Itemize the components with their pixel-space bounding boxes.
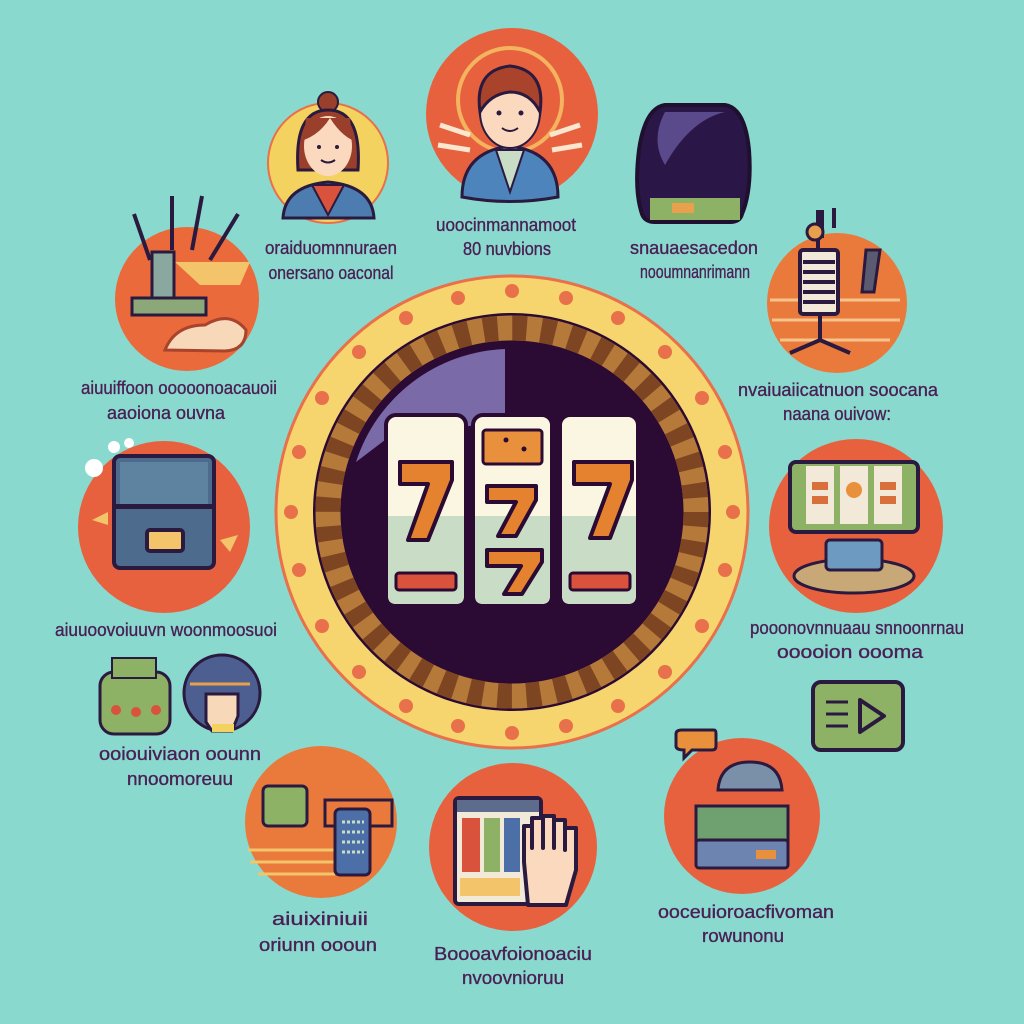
icon: wallet on orange circle — [664, 730, 820, 894]
icon: woman on yellow circle — [268, 92, 388, 223]
caption: bottom centre: Boooavfoionoaciu — [434, 944, 592, 964]
caption: top right: snauaesacedon — [630, 238, 758, 258]
caption: top right — [630, 238, 758, 282]
caption: top centre: 80 nuvbions — [463, 239, 551, 259]
rim dots — [284, 284, 740, 740]
caption: right upper — [738, 380, 939, 424]
caption: top right: nooumnanrimann — [640, 262, 750, 282]
caption: top centre — [436, 215, 576, 259]
caption: right middle: pooonovnnuaau snnoonrnau — [750, 618, 964, 638]
icon: video player — [813, 682, 903, 750]
caption: top left: onersano oaconal — [268, 263, 394, 283]
caption: top centre: uoocinmannamoot — [436, 215, 576, 235]
caption: right upper: nvaiuaiicatnuon soocana — [738, 380, 939, 400]
caption: bottom left: oriunn oooun — [259, 935, 377, 955]
icon: hand on blue circle — [184, 655, 260, 732]
caption: left upper — [81, 378, 277, 423]
caption: left middle: aiuuoovoiuuvn woonmoosuoi — [55, 620, 277, 640]
caption: bottom right — [658, 902, 834, 946]
icon: green gadget — [100, 658, 170, 734]
icon: microphone on orange circle — [767, 208, 907, 373]
caption: bottom right: ooceuioroacfivoman — [658, 902, 834, 922]
icon: man on orange circle — [426, 28, 598, 202]
caption: left lower: nnoomoreuu — [127, 769, 233, 789]
icon: router on orange circle — [115, 196, 259, 371]
caption: bottom left: aiuixiniuii — [272, 909, 368, 929]
caption: top left — [265, 238, 397, 283]
icon: hand on tablet — [429, 763, 597, 931]
reel: right — [560, 415, 638, 606]
caption: bottom centre: nvoovnioruu — [462, 968, 564, 988]
caption: bottom centre — [434, 944, 592, 988]
central slot machine wheel — [276, 276, 748, 748]
caption: left upper: aaoiona ouvna — [107, 403, 226, 423]
icon: monitor on orange circle — [769, 439, 943, 613]
icon: cards on orange circle — [245, 746, 397, 898]
caption: bottom right: rowunonu — [702, 926, 784, 946]
caption: left lower: ooiouiviaon oounn — [99, 744, 261, 764]
caption: right upper: naana ouivow: — [783, 404, 891, 424]
icon: machine on orange circle — [78, 438, 250, 613]
icon: dark device — [637, 105, 750, 222]
caption: right middle — [750, 618, 964, 662]
caption: top left: oraiduomnnuraen — [265, 238, 397, 258]
caption: right middle: ooooion oooma — [777, 642, 924, 662]
reel: middle — [473, 415, 552, 606]
caption: left lower — [99, 744, 261, 789]
reel: left — [386, 415, 466, 606]
caption: left upper: aiuuiffoon ooooonoacauoii — [81, 378, 277, 398]
caption: bottom left — [259, 909, 377, 955]
